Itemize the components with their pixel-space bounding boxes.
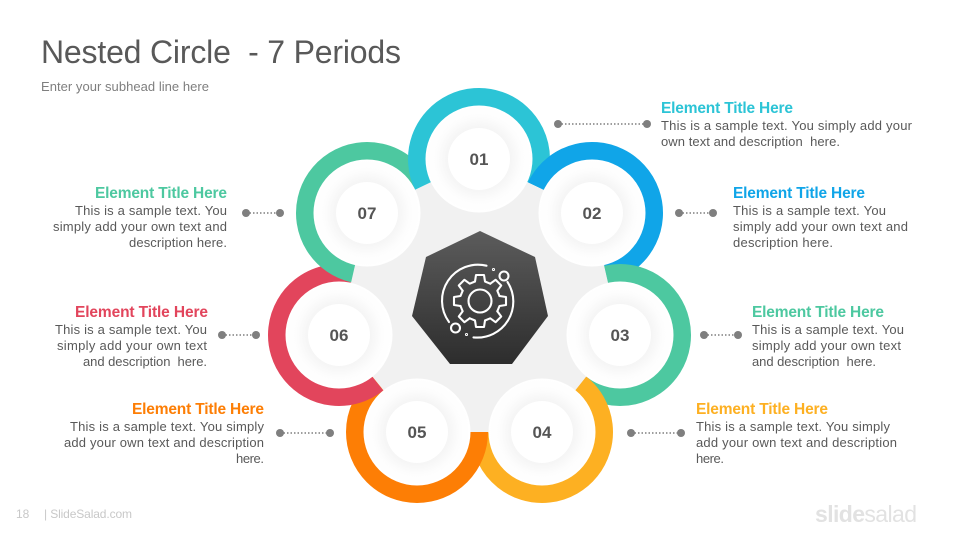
footer page number: 18 [16,507,30,521]
node 07 [314,160,420,266]
node 05 [364,378,470,486]
text block 04: This is a sample text. You simply [696,419,890,434]
node 06 [286,282,392,388]
icon: gear with orbit [442,265,513,338]
node 06: 06 [330,326,348,345]
text block 05: add your own text and description [64,435,264,450]
text block 02 [733,185,908,250]
node 04 [488,378,596,486]
connector 02 [675,209,717,217]
text block 01: Element Title Here [661,100,793,117]
node 03 [566,282,674,388]
text block 05: here. [236,451,264,466]
footer site name: | SlideSalad.com [44,507,132,521]
text block 07: This is a sample text. You [75,203,227,218]
text block 03 [752,304,904,369]
nested ring arcs [252,76,694,519]
node 02: 02 [583,204,601,223]
connector 01 [554,120,651,128]
text block 06: Element Title Here [75,304,208,321]
subhead: Enter your subhead line here [41,79,209,94]
title: Nested Circle - 7 Periods [41,34,401,70]
connector 03 [700,331,742,339]
text block 04: add your own text and description [696,435,897,450]
text block 03: and description here. [752,354,876,369]
text block 01 [661,100,913,149]
text block 05 [64,401,264,466]
text block 05: This is a sample text. You simply [70,419,264,434]
text block 02: simply add your own text and [733,219,908,234]
central grey heptagon backdrop [339,159,620,432]
connector 04 [627,429,685,437]
text block 06 [55,304,208,369]
text block 04 [696,401,897,466]
text block 03: Element Title Here [752,304,884,321]
logo wordmark: slidesalad [815,501,917,527]
node 01: 01 [470,150,488,169]
text block 01: own text and description here. [661,134,840,149]
text block 06: This is a sample text. You [55,322,207,337]
text block 06: simply add your own text [57,338,207,353]
text block 02: Element Title Here [733,185,865,202]
text block 04: Element Title Here [696,401,828,418]
connector 06 [218,331,260,339]
node 01 [426,106,532,212]
connector 05 [276,429,334,437]
node 03: 03 [611,326,629,345]
node 04: 04 [533,423,552,442]
text block 05: Element Title Here [132,401,264,418]
text block 03: simply add your own text [752,338,901,353]
text block 06: and description here. [83,354,207,369]
text block 02: This is a sample text. You [733,203,886,218]
text block 01: This is a sample text. You simply add your [661,118,913,133]
node 05: 05 [408,423,426,442]
node 07: 07 [358,204,376,223]
node 02 [538,160,646,266]
text block 03: This is a sample text. You [752,322,904,337]
center dark heptagon [412,231,548,364]
text block 07: simply add your own text and [53,219,227,234]
text block 02: description here. [733,235,833,250]
text block 07 [53,185,227,250]
connector 07 [242,209,284,217]
text block 07: Element Title Here [95,185,227,202]
text block 07: description here. [129,235,227,250]
text block 04: here. [696,451,724,466]
